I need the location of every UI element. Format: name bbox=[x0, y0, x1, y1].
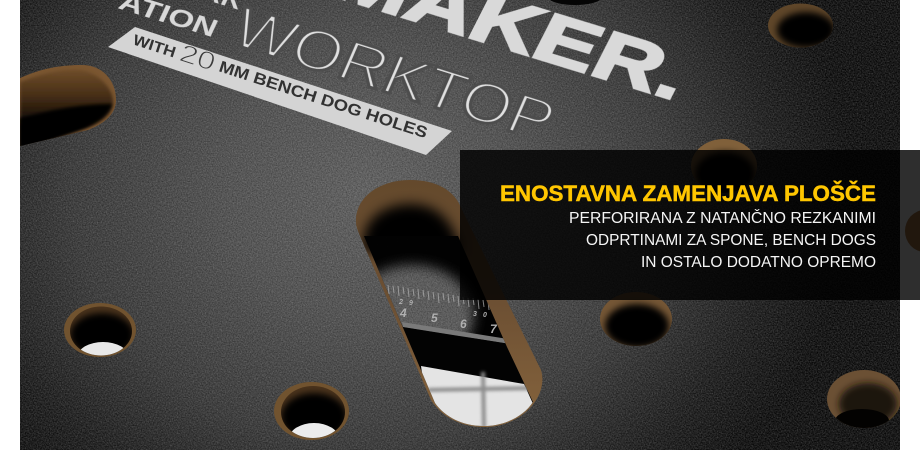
hole: behind panel lower bbox=[600, 292, 672, 346]
faint hole at far right edge bbox=[905, 210, 920, 252]
ruler numerals bbox=[398, 299, 498, 336]
white floor seen through slot bbox=[421, 366, 532, 426]
strip text WITH: WITH bbox=[131, 32, 178, 61]
ruler numerals: 0 bbox=[483, 312, 487, 319]
printed thin word WORKTOP: WORKTOP bbox=[224, 0, 564, 154]
ruler numerals: 9 bbox=[409, 300, 413, 307]
hole: behind panel upper bbox=[691, 139, 757, 193]
heading: ENOSTAVNA ZAMENJAVA PLOŠČE bbox=[500, 181, 876, 206]
description line 3: IN OSTALO DODATNO OPREMO bbox=[641, 254, 876, 271]
ruler surface bbox=[377, 258, 506, 344]
elongated slot showing ruler and floor bbox=[350, 180, 545, 430]
strip text MM BENCH DOG HOLES: MM BENCH DOG HOLES bbox=[217, 59, 430, 142]
ruler numerals: 7 bbox=[490, 322, 498, 336]
ruler numerals: 6 bbox=[460, 317, 467, 331]
hole: black notch at top edge bbox=[548, 0, 602, 5]
ruler numerals: 3 bbox=[473, 311, 477, 318]
hole: lower middle with white light bbox=[274, 382, 349, 440]
hole: top right bbox=[768, 4, 833, 48]
hole: lower right bbox=[827, 370, 900, 428]
dark translucent caption panel bbox=[460, 150, 920, 300]
ruler numerals: 5 bbox=[431, 311, 438, 325]
printed label strip bbox=[108, 27, 452, 155]
hole: top-left slot bbox=[20, 65, 116, 146]
ruler numerals: 2 bbox=[398, 299, 403, 306]
description line 2: ODPRTINAMI ZA SPONE, BENCH DOGS bbox=[586, 232, 876, 249]
ruler numerals: 4 bbox=[399, 306, 407, 320]
description line 1: PERFORIRANA Z NATANČNO REZKANIMI bbox=[569, 210, 876, 227]
strip text 20: 20 bbox=[176, 39, 219, 77]
hole: lower left with white light bbox=[64, 303, 136, 357]
